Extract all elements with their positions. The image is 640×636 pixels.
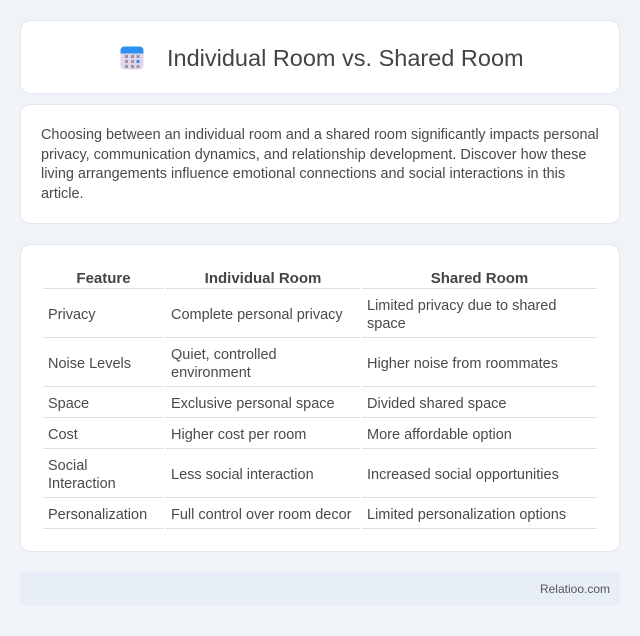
comparison table panel bbox=[20, 244, 620, 552]
row: personalization: Personalization bbox=[48, 507, 147, 523]
footer text: Relatioo.com bbox=[540, 582, 610, 596]
row: privacy: space bbox=[367, 316, 406, 332]
title card bbox=[20, 20, 620, 94]
table header: Feature bbox=[76, 270, 131, 287]
table header: Individual Room bbox=[205, 270, 321, 287]
row: noise levels: Higher noise from roommates bbox=[367, 356, 558, 372]
footer bar bbox=[20, 572, 620, 606]
row: personalization: Full control over room decor bbox=[171, 507, 352, 523]
row: space: Exclusive personal space bbox=[171, 396, 335, 412]
row: space: Space bbox=[48, 396, 89, 412]
row: social interaction: Less social interaction bbox=[171, 467, 314, 483]
row: social interaction bbox=[48, 458, 559, 492]
intro paragraph: living arrangements influence emotional connections and social interactions in this bbox=[41, 166, 565, 182]
title: Individual Room vs. Shared Room bbox=[167, 45, 524, 71]
row: social interaction: Increased social opportunities bbox=[367, 467, 559, 483]
row: cost: Higher cost per room bbox=[171, 427, 306, 443]
row: privacy bbox=[48, 298, 556, 332]
row: noise levels: Quiet, controlled bbox=[171, 347, 277, 363]
icon: calendar bbox=[120, 46, 144, 70]
row: personalization bbox=[48, 507, 566, 523]
table header: Shared Room bbox=[431, 270, 528, 287]
row: noise levels bbox=[48, 347, 558, 381]
row: privacy: Complete personal privacy bbox=[171, 307, 343, 323]
intro paragraph: privacy, communication dynamics, and relationship development. Discover how these bbox=[41, 147, 586, 163]
intro paragraph: article. bbox=[41, 186, 84, 202]
table header bbox=[76, 270, 528, 287]
intro paragraph bbox=[41, 127, 599, 202]
row: privacy: Limited privacy due to shared bbox=[367, 298, 556, 314]
row: space: Divided shared space bbox=[367, 396, 506, 412]
row: cost: More affordable option bbox=[367, 427, 512, 443]
row: space bbox=[48, 396, 506, 412]
intro paragraph: Choosing between an individual room and a shared room significantly impacts personal bbox=[41, 127, 599, 143]
row: cost bbox=[48, 427, 512, 443]
intro text panel bbox=[20, 104, 620, 224]
row: noise levels: Noise Levels bbox=[48, 356, 131, 372]
row: personalization: Limited personalization options bbox=[367, 507, 566, 523]
row: social interaction: Social bbox=[48, 458, 88, 474]
row: cost: Cost bbox=[48, 427, 78, 443]
row: privacy: Privacy bbox=[48, 307, 96, 323]
row: noise levels: environment bbox=[171, 365, 251, 381]
row: social interaction: Interaction bbox=[48, 476, 116, 492]
